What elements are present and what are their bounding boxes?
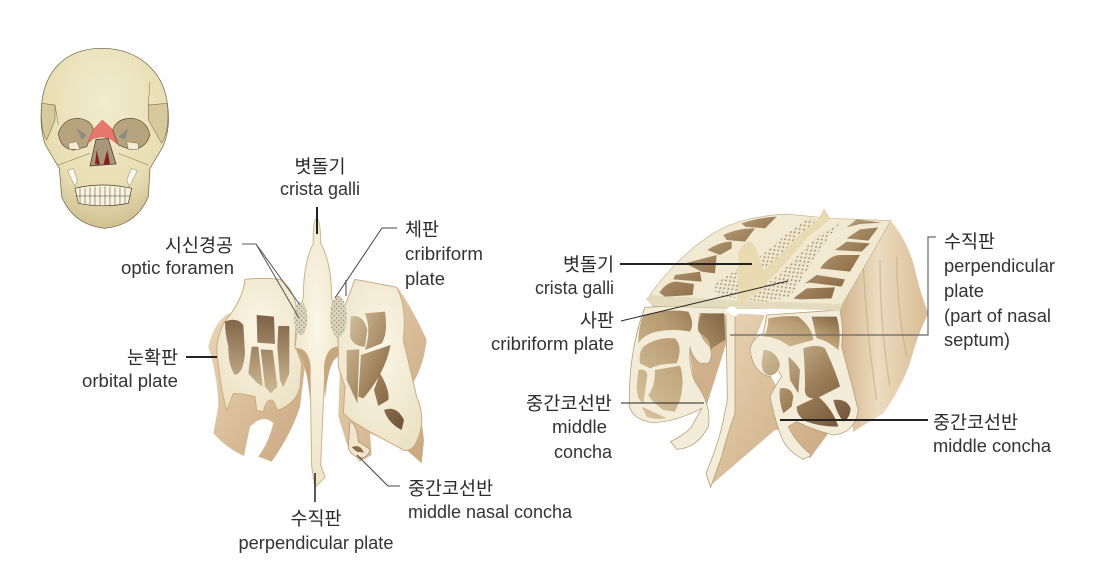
- label: middle nasal concha: middle nasal concha: [408, 502, 573, 522]
- label: middle concha, left: middle: [552, 417, 607, 437]
- label: perpendicular plate: [238, 508, 394, 553]
- label: crista galli: 볏돌기: [294, 156, 346, 177]
- label: perpendicular plate, part of nasal septum: septum): [944, 330, 1010, 350]
- label: perpendicular plate: 수직판: [290, 508, 342, 529]
- label: cribriform plate, 3D view: cribriform plate: [491, 334, 614, 354]
- label: perpendicular plate, part of nasal septum: (part of nasal: [944, 306, 1051, 326]
- label: cribriform plate, 3D view: [491, 310, 614, 354]
- label: perpendicular plate, part of nasal septum: 수직판: [944, 231, 995, 252]
- label: perpendicular plate, part of nasal septum: [944, 231, 1055, 350]
- leader lines: [186, 207, 936, 502]
- label: crista galli: [280, 156, 360, 199]
- label: crista galli, 3D view: [535, 254, 614, 298]
- label: crista galli: crista galli: [280, 179, 360, 199]
- label: optic foramen: 시신경공: [165, 235, 233, 256]
- label: cribriform plate: [405, 219, 483, 289]
- label: middle concha, right: [933, 412, 1052, 456]
- label: cribriform plate: cribriform: [405, 244, 483, 264]
- label: perpendicular plate, part of nasal septum: perpendicular: [944, 256, 1055, 276]
- icon: skull with highlighted ethmoid bone: [41, 48, 169, 228]
- label: cribriform plate, 3D view: 사판: [580, 310, 614, 331]
- label: middle concha, left: concha: [554, 442, 613, 462]
- label: middle concha, left: [526, 393, 613, 462]
- label: orbital plate: orbital plate: [82, 371, 178, 391]
- label: middle concha, left: 중간코선반: [526, 393, 612, 414]
- label: cribriform plate: plate: [405, 269, 445, 289]
- label: optic foramen: [121, 235, 234, 278]
- label: middle concha, right: middle concha: [933, 436, 1052, 456]
- label: orbital plate: [82, 347, 178, 391]
- label: crista galli, 3D view: 볏돌기: [563, 254, 614, 275]
- label: perpendicular plate, part of nasal septum: plate: [944, 281, 984, 301]
- illustration: ethmoid bone, 3D view: [629, 209, 928, 487]
- label: cribriform plate: 체판: [405, 219, 439, 240]
- label: middle nasal concha: 중간코선반: [408, 478, 493, 499]
- label: crista galli, 3D view: crista galli: [535, 278, 614, 298]
- illustration: ethmoid bone, coronal section: [208, 218, 427, 487]
- label: orbital plate: 눈확판: [127, 347, 178, 368]
- label: middle nasal concha: [408, 478, 573, 522]
- label: middle concha, right: 중간코선반: [933, 412, 1018, 433]
- label: optic foramen: optic foramen: [121, 258, 234, 278]
- label: perpendicular plate: perpendicular plate: [238, 533, 394, 553]
